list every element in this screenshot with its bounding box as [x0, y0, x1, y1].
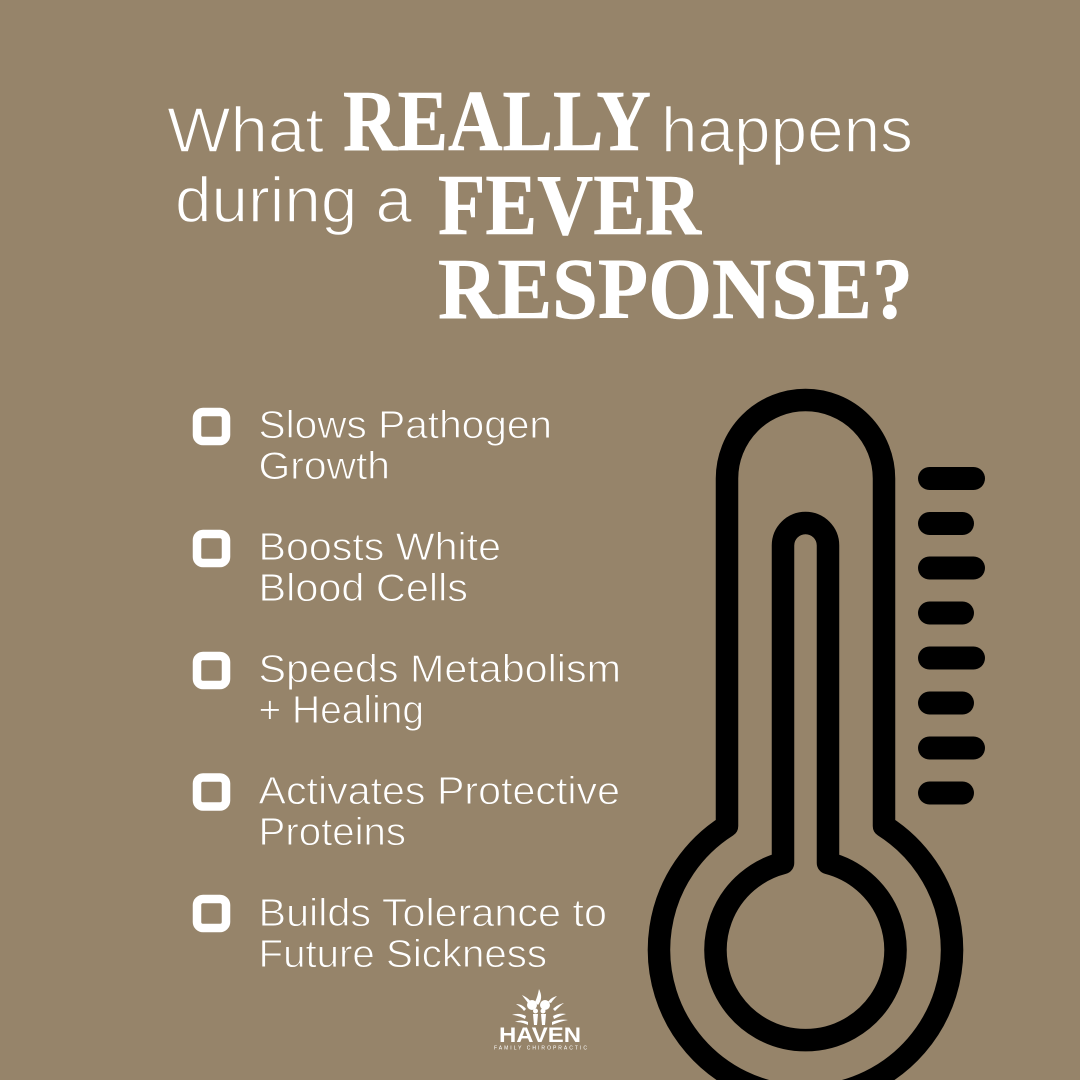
heading text: happens: happens: [661, 94, 913, 166]
list item: Builds Tolerance to Future Sickness: Future Sickness: [258, 933, 547, 976]
logo tagline: FAMILY CHIROPRACTIC: [494, 1046, 587, 1052]
list item: Activates Protective Proteins: Activates Protective: [258, 770, 620, 813]
thermometer inner tube and bulb: [716, 523, 895, 1040]
checklist: [197, 404, 621, 976]
list item: Activates Protective Proteins: Proteins: [258, 811, 406, 854]
list item: Speeds Metabolism + Healing: Speeds Metabolism: [258, 648, 621, 691]
heading text: What: What: [167, 94, 324, 166]
list item: Activates Protective Proteins: [197, 770, 620, 854]
thermometer scale ticks: [930, 478, 974, 793]
list item: Slows Pathogen Growth: Slows Pathogen: [258, 404, 552, 447]
list item: Builds Tolerance to Future Sickness: [197, 892, 607, 976]
heading text: during a: during a: [175, 164, 412, 236]
list item: Boosts White Blood Cells: [197, 526, 501, 610]
list item: Builds Tolerance to Future Sickness: Builds Tolerance to: [258, 892, 607, 935]
logo: Haven Family Chiropractic: [494, 989, 587, 1052]
heading emphasis: FEVER: FEVER: [438, 156, 702, 253]
title: [167, 72, 913, 337]
list item: Slows Pathogen Growth: [197, 404, 552, 488]
logo sunburst with family figures: [512, 989, 568, 1025]
list item: Speeds Metabolism + Healing: + Healing: [258, 689, 424, 732]
list item: Boosts White Blood Cells: Blood Cells: [258, 567, 468, 610]
heading emphasis: REALLY: REALLY: [343, 72, 651, 169]
list item: Boosts White Blood Cells: Boosts White: [258, 526, 501, 569]
icon: thermometer: [659, 400, 974, 1080]
thermometer outer outline: [659, 400, 952, 1080]
heading emphasis: RESPONSE?: RESPONSE?: [438, 240, 913, 337]
list item: Speeds Metabolism + Healing: [197, 648, 621, 732]
logo wordmark: HAVEN: [499, 1024, 581, 1047]
list item: Slows Pathogen Growth: Growth: [258, 445, 390, 488]
